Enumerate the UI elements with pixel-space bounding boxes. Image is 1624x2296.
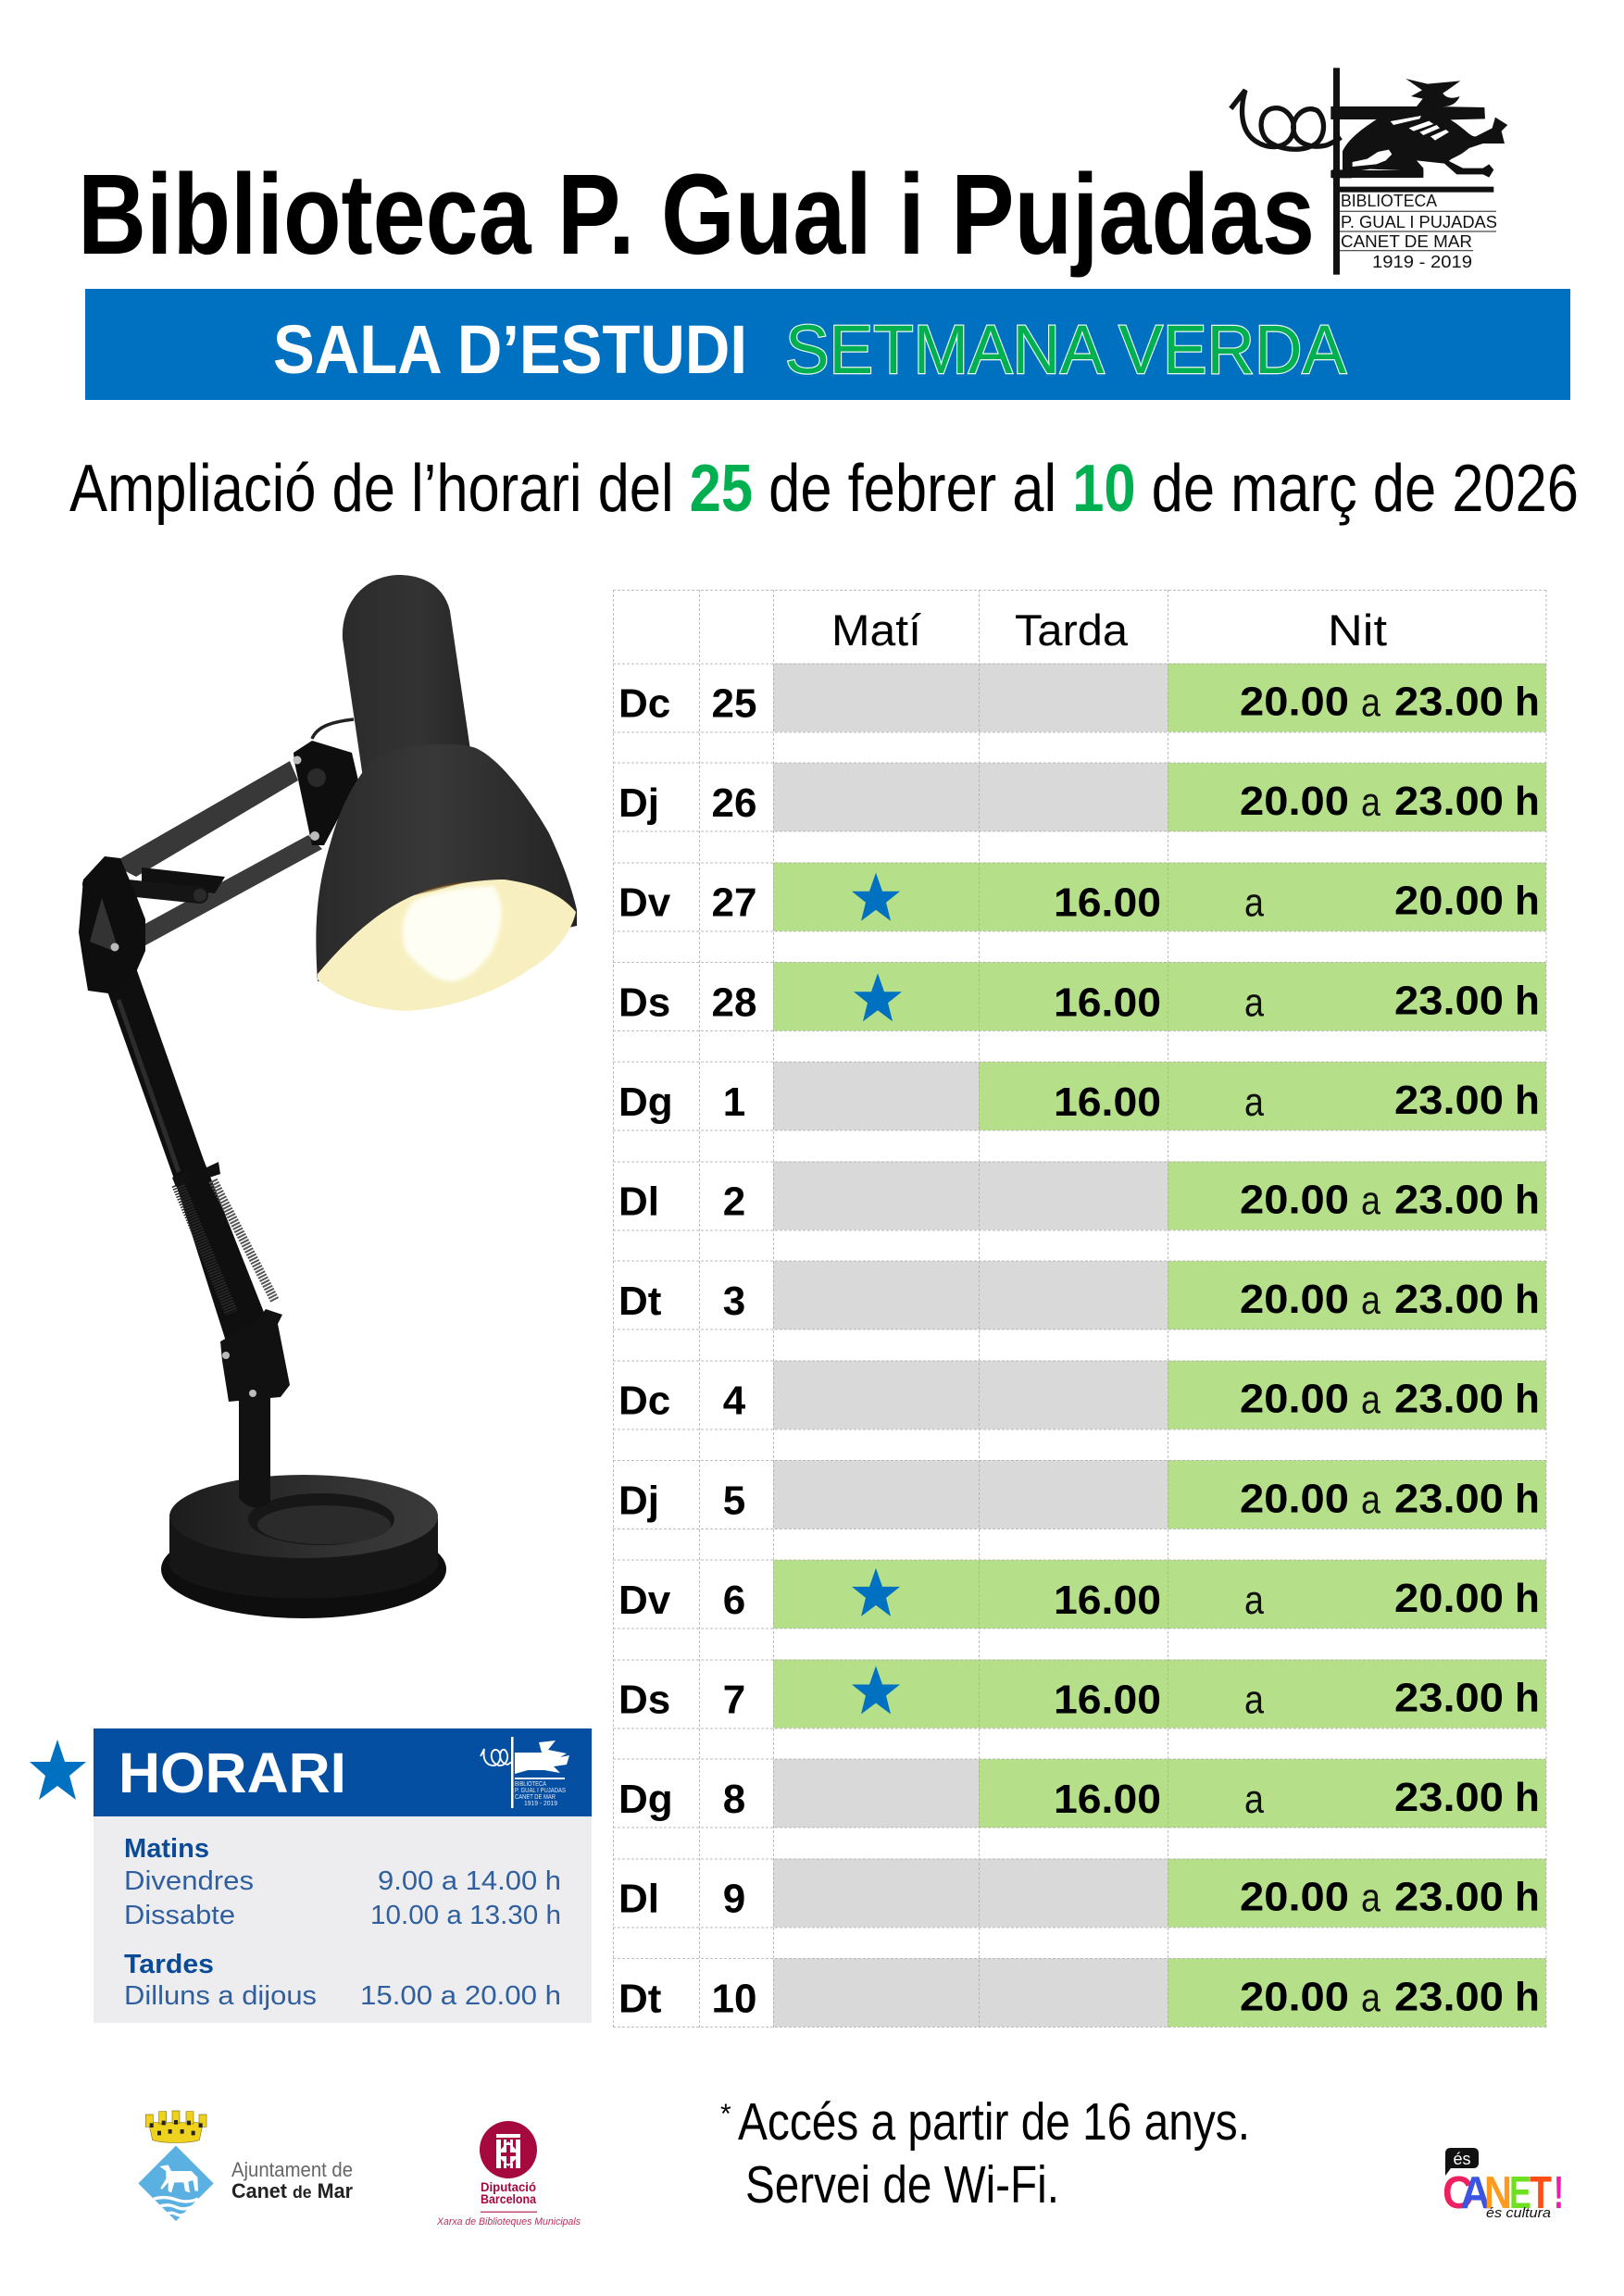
row: Dl 2: 20.00 bbox=[1240, 1178, 1349, 1222]
logo: Ajuntament de Canet de Mar: Canet de Mar bbox=[231, 2179, 353, 2202]
row: Dt 10 bbox=[618, 1958, 1546, 2027]
icon: white logo: 1919 - 2019 bbox=[524, 1801, 557, 1807]
row: Dv 27: 20.00 bbox=[1394, 879, 1504, 924]
row: Dj 5: a bbox=[1361, 1477, 1380, 1522]
icon: legend star bbox=[30, 1740, 86, 1800]
logo: és Canet: és cultura bbox=[1486, 2205, 1551, 2221]
row: Ds 28: 28 bbox=[712, 980, 756, 1025]
logo: és Canet: C bbox=[1443, 2168, 1473, 2218]
row: Dl 2: a bbox=[1361, 1178, 1380, 1224]
icon: library centenary logo bbox=[1230, 68, 1507, 275]
icon: white logo: BIBLIOTECA bbox=[515, 1781, 546, 1788]
row: Dc 25 bbox=[618, 663, 1546, 731]
text: matins bbox=[124, 1834, 561, 1930]
logo: Diputació Barcelona: Diputació bbox=[481, 2179, 536, 2194]
row: Ds 7: 23.00 bbox=[1394, 1676, 1504, 1720]
logo: Ajuntament de Canet de Mar: Ajuntament de bbox=[231, 2158, 353, 2181]
row: Dt 3: 20.00 bbox=[1240, 1277, 1349, 1322]
banner: sala d'estudi: SALA D’ESTUDI bbox=[273, 311, 747, 388]
row: Dg 1: h bbox=[1515, 1078, 1540, 1123]
row: Dl 9 bbox=[618, 1859, 1546, 1928]
row: Dt 10: 10 bbox=[712, 1976, 756, 2021]
row: Dt 10: h bbox=[1515, 1974, 1540, 2019]
row: Dg 8: 23.00 bbox=[1394, 1775, 1504, 1820]
lamp lower arm bbox=[97, 963, 290, 1402]
row: Dt 3: 3 bbox=[723, 1279, 745, 1324]
schedule table bbox=[613, 590, 1546, 2028]
icon: library centenary logo: P. GUAL I PUJADAS bbox=[1341, 213, 1497, 231]
row: Dc 4: Dc bbox=[618, 1379, 670, 1424]
logo: Diputació Barcelona: Xarxa de Biblioteques Municipals bbox=[436, 2216, 581, 2227]
row: Dj 26: h bbox=[1515, 779, 1540, 824]
row: Dc 25: a bbox=[1361, 680, 1380, 726]
logo: és Canet: és bbox=[1453, 2150, 1471, 2168]
text: matins: Divendres bbox=[124, 1866, 254, 1896]
lamp base bbox=[161, 1398, 446, 1618]
row: Dv 27: Dv bbox=[618, 880, 671, 926]
row: Ds 7: Ds bbox=[618, 1678, 670, 1722]
row: Dl 2: Dl bbox=[618, 1179, 659, 1224]
icon: library centenary logo: BIBLIOTECA bbox=[1341, 192, 1437, 210]
row: Dv 27: 27 bbox=[712, 880, 756, 926]
lamp shade bbox=[316, 575, 577, 1011]
row: Dj 26: 23.00 bbox=[1394, 779, 1504, 824]
table header: Matí bbox=[831, 605, 921, 655]
row: Dv 6: Dv bbox=[618, 1578, 671, 1623]
row: Dl 9: 23.00 bbox=[1394, 1875, 1504, 1920]
table header: Nit bbox=[1328, 605, 1387, 655]
row: Dj 26: 26 bbox=[712, 780, 756, 826]
row: Dg 1: 23.00 bbox=[1394, 1078, 1504, 1123]
spring: front bbox=[213, 1180, 275, 1301]
row: Dv 27: 16.00 bbox=[1054, 880, 1161, 926]
icon: crown bbox=[145, 2111, 206, 2142]
row: Dt 3: 23.00 bbox=[1394, 1277, 1504, 1322]
row: Dl 2 bbox=[618, 1161, 1546, 1229]
row: Dg 1 bbox=[618, 1062, 1546, 1130]
text: tardes bbox=[124, 1950, 561, 2011]
text: matins: Matins bbox=[124, 1834, 209, 1864]
row: Dc 25: 23.00 bbox=[1394, 680, 1504, 724]
row: Dj 5 bbox=[618, 1460, 1546, 1529]
row: Dg 8: 16.00 bbox=[1054, 1777, 1161, 1822]
text: matins: 9.00 a 14.00 h bbox=[378, 1866, 561, 1896]
text: tardes: 15.00 a 20.00 h bbox=[360, 1981, 561, 2011]
row: Dt 3: h bbox=[1515, 1277, 1540, 1322]
text: matins: 10.00 a 13.30 h bbox=[370, 1901, 561, 1930]
row: Dl 9: 20.00 bbox=[1240, 1875, 1349, 1920]
row: Dg 8: Dg bbox=[618, 1777, 673, 1822]
logo: és Canet: N bbox=[1484, 2168, 1512, 2218]
row: Dj 26: Dj bbox=[618, 780, 659, 826]
icon: white logo: P. GUAL I PUJADAS bbox=[515, 1788, 566, 1794]
row: Dj 5: Dj bbox=[618, 1478, 659, 1523]
row: Dt 3: a bbox=[1361, 1278, 1380, 1323]
note: access and wifi bbox=[720, 2092, 1250, 2215]
row: Dl 9: a bbox=[1361, 1876, 1380, 1921]
row: Dv 6: a bbox=[1244, 1578, 1264, 1623]
row: Ds 7: 16.00 bbox=[1054, 1678, 1161, 1722]
row: Dc 4 bbox=[618, 1361, 1546, 1429]
row: Dc 4: 23.00 bbox=[1394, 1377, 1504, 1422]
text: tardes: Tardes bbox=[124, 1950, 214, 1979]
row: Ds 7: h bbox=[1515, 1676, 1540, 1720]
row: Dg 1: 16.00 bbox=[1054, 1079, 1161, 1125]
row: Dc 4: a bbox=[1361, 1378, 1380, 1423]
icon: library centenary logo: 1919 - 2019 bbox=[1372, 253, 1472, 271]
lamp upper arms bbox=[79, 741, 358, 993]
row: Ds 28 bbox=[618, 962, 1546, 1030]
row: Dj 5: 23.00 bbox=[1394, 1476, 1504, 1521]
row: Dt 3 bbox=[618, 1261, 1546, 1329]
row: Dt 10: 23.00 bbox=[1394, 1974, 1504, 2019]
row: Ds 28: h bbox=[1515, 978, 1540, 1023]
row: Dt 10: Dt bbox=[618, 1976, 662, 2021]
row: Dg 8: 8 bbox=[723, 1777, 745, 1822]
row: Ds 7: a bbox=[1244, 1678, 1264, 1722]
row: Ds 28: a bbox=[1244, 980, 1264, 1025]
logo: és Canet bbox=[1443, 2148, 1564, 2221]
row: Dv 6: 6 bbox=[723, 1578, 745, 1623]
row: Ds 7: 7 bbox=[723, 1678, 745, 1722]
logo: és Canet: A bbox=[1460, 2168, 1491, 2218]
row: Dt 10: a bbox=[1361, 1975, 1380, 2020]
icon: white logo: CANET DE MAR bbox=[515, 1794, 556, 1801]
lamp cable bbox=[312, 719, 354, 739]
logo: Diputació Barcelona bbox=[436, 2121, 581, 2227]
note: access and wifi: Servei de Wi-Fi. bbox=[745, 2155, 1059, 2215]
row: Dv 27 bbox=[618, 863, 1546, 931]
row: Dj 5: 20.00 bbox=[1240, 1476, 1349, 1521]
row: Dv 6: 20.00 bbox=[1394, 1576, 1504, 1621]
panel: horari bbox=[94, 1728, 592, 2023]
row: Dc 25: h bbox=[1515, 680, 1540, 724]
row: Dc 4: 20.00 bbox=[1240, 1377, 1349, 1422]
row: Dv 27: h bbox=[1515, 879, 1540, 924]
row: Dl 9: Dl bbox=[618, 1877, 659, 1922]
row: Ds 28: 23.00 bbox=[1394, 978, 1504, 1023]
table header: Tarda bbox=[1015, 605, 1129, 655]
icon: white logo bbox=[481, 1737, 569, 1808]
date range text: Ampliació de l’horari del 25 de febrer al 10 de març de 2026 bbox=[69, 452, 1579, 526]
row: Dg 8: a bbox=[1244, 1777, 1264, 1822]
illustration: desk lamp bbox=[79, 575, 577, 1618]
icon: shield diamond bbox=[138, 2146, 214, 2221]
row: Dg 1: a bbox=[1244, 1079, 1264, 1125]
logo: és Canet: T bbox=[1530, 2168, 1552, 2218]
row: Dg 8: h bbox=[1515, 1775, 1540, 1820]
title: Biblioteca P. Gual i Pujadas bbox=[78, 152, 1315, 279]
logo: Diputació Barcelona: Barcelona bbox=[481, 2191, 536, 2206]
row: Dv 6: 16.00 bbox=[1054, 1578, 1161, 1623]
note: access and wifi: Accés a partir de 16 anys. bbox=[738, 2092, 1250, 2152]
row: Dc 25: Dc bbox=[618, 681, 670, 726]
row: Dc 25: 25 bbox=[712, 681, 756, 726]
row: Dl 9: 9 bbox=[723, 1877, 745, 1922]
row: Ds 28: Ds bbox=[618, 980, 670, 1025]
row: Dj 26 bbox=[618, 763, 1546, 831]
row: Dj 26: 20.00 bbox=[1240, 779, 1349, 824]
row: Dl 2: h bbox=[1515, 1178, 1540, 1222]
row: Ds 28: 16.00 bbox=[1054, 980, 1161, 1025]
row: Dj 5: h bbox=[1515, 1476, 1540, 1521]
text: matins: Dissabte bbox=[124, 1901, 235, 1930]
row: Dg 8 bbox=[618, 1759, 1546, 1828]
row: Dj 5: 5 bbox=[723, 1478, 745, 1523]
logo: és Canet: E bbox=[1509, 2168, 1531, 2218]
logo: Ajuntament de Canet de Mar bbox=[138, 2111, 353, 2221]
banner: sala d'estudi: SETMANA VERDA bbox=[785, 311, 1347, 388]
row: Dl 9: h bbox=[1515, 1875, 1540, 1920]
spring: rear bbox=[178, 1184, 231, 1313]
text: tardes: Dilluns a dijous bbox=[124, 1981, 317, 2011]
row: Ds 7 bbox=[618, 1659, 1546, 1728]
row: Dc 4: 4 bbox=[723, 1379, 746, 1424]
row: Dg 1: 1 bbox=[723, 1079, 745, 1125]
row: Dt 3: Dt bbox=[618, 1279, 662, 1324]
table header bbox=[831, 605, 1387, 655]
row: Dt 10: 20.00 bbox=[1240, 1974, 1349, 2019]
row: Dg 1: Dg bbox=[618, 1079, 673, 1125]
logo: és Canet: ! bbox=[1554, 2168, 1564, 2218]
row: Dc 25: 20.00 bbox=[1240, 680, 1349, 724]
row: Dv 27: a bbox=[1244, 880, 1264, 926]
banner: sala d'estudi bbox=[85, 289, 1570, 400]
row: Dv 6: h bbox=[1515, 1576, 1540, 1621]
note: access and wifi: * bbox=[720, 2099, 731, 2129]
row: Dc 4: h bbox=[1515, 1377, 1540, 1422]
row: Dj 26: a bbox=[1361, 780, 1380, 825]
icon: library centenary logo: CANET DE MAR bbox=[1341, 232, 1472, 251]
row: Dl 2: 23.00 bbox=[1394, 1178, 1504, 1222]
row: Dv 6 bbox=[618, 1560, 1546, 1628]
heading: horari: HORARI bbox=[119, 1741, 346, 1804]
row: Dl 2: 2 bbox=[723, 1179, 745, 1224]
